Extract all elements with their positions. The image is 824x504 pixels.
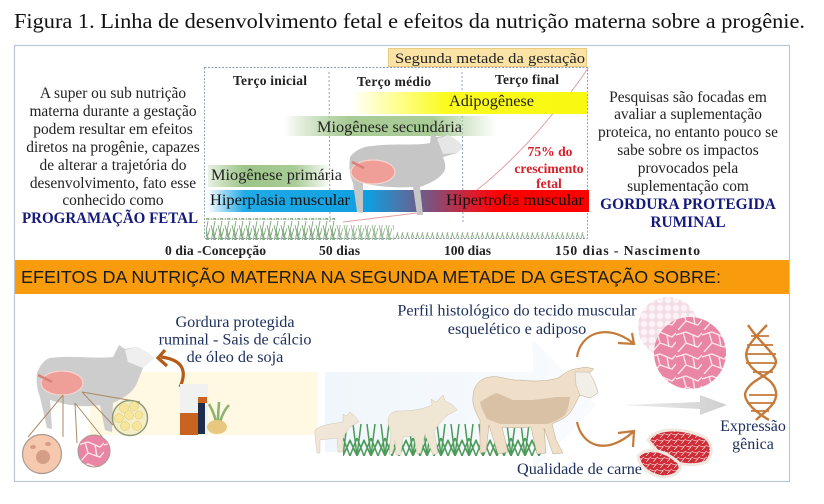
- heading: histology: Perfil histológico do tecido muscular: [397, 302, 637, 320]
- heading: histology: esquelético e adiposo: [448, 320, 586, 338]
- text block: right: sabe sobre os impactos: [617, 142, 759, 159]
- inset: cell: [22, 434, 62, 474]
- text block: left: desenvolvimento, fato esse: [30, 175, 196, 192]
- text block: left: podem resultar em efeitos: [33, 121, 193, 138]
- text block: right: avaliar a suplementação: [614, 106, 762, 123]
- trimester headings: Terço médio: [357, 74, 431, 89]
- icon: ewe with tissue insets: [22, 345, 154, 474]
- text block: right: Pesquisas são focadas em: [609, 89, 767, 106]
- arrow: feed to ewe: [161, 357, 183, 387]
- inset: fat cells: [112, 400, 148, 436]
- heading band: effects: [15, 260, 789, 294]
- bar: adipogênese: Adipogênese: [449, 93, 534, 110]
- text block: right: GORDURA PROTEGIDA: [600, 196, 776, 213]
- icon: lamb small: [315, 412, 359, 453]
- bar: hiperplasia to hipertrofia: Hipertrofia muscular: [446, 192, 585, 209]
- bar: miogênese secundária: [284, 116, 496, 136]
- text block: right: proteica, no entanto pouco se: [598, 124, 778, 141]
- timeline axis labels: [165, 243, 700, 258]
- text block: right: suplementação com: [627, 178, 749, 195]
- trimester headings: Terço final: [495, 72, 559, 87]
- background arrow: [325, 340, 597, 470]
- heading: histology: [397, 302, 637, 338]
- title: Figura 1. Linha de desenvolvimento fetal e efeitos da nutrição materna sobre a progênie.: [14, 11, 805, 33]
- text block: right: RUMINAL: [650, 214, 726, 231]
- callout: 75% fetal growth: 75% do: [528, 144, 573, 159]
- text block: left: conhecido como: [62, 192, 164, 209]
- callout: 75% fetal growth: [514, 144, 584, 191]
- timeline axis labels: 0 dia -Concepção: [165, 243, 266, 258]
- text block: left: diretos na progênie, capazes: [26, 139, 200, 156]
- text block: left: materna durante a gestação: [29, 103, 197, 120]
- heading band: effects: EFEITOS DA NUTRIÇÃO MATERNA NA SEGUNDA METADE DA GESTAÇÃO SOBRE:: [21, 267, 721, 287]
- growth curve: [343, 68, 588, 222]
- timeline axis labels: 50 dias: [319, 243, 360, 258]
- text block: left: [22, 85, 200, 227]
- text block: right: provocados pela: [638, 160, 738, 177]
- icon: lamb medium: [388, 395, 457, 455]
- bar: hiperplasia to hipertrofia: [207, 190, 589, 212]
- label: meat quality: Qualidade de carne: [517, 460, 642, 478]
- label: second half of gestation: Segunda metade da gestação: [395, 51, 585, 67]
- heading: protected fat: ruminal - Sais de cálcio: [159, 330, 311, 348]
- text block: right: [598, 89, 778, 231]
- heading: protected fat: [159, 313, 311, 366]
- icon: adipose histology: [638, 297, 698, 357]
- heading: protected fat: de óleo de soja: [187, 348, 283, 366]
- icon: DNA helix: [745, 325, 776, 420]
- arrow: to gene expression: [622, 395, 727, 415]
- trimester headings: [233, 72, 559, 89]
- panel: progeny development: [315, 297, 786, 478]
- timeline axis labels: 150 dias - Nascimento: [555, 243, 700, 258]
- bar: miogênese secundária: Miogênese secundária: [317, 119, 462, 136]
- arrow: to meat: [577, 422, 633, 446]
- text block: left: de alterar a trajetória do: [40, 157, 187, 174]
- label: gene expression: Expressão: [720, 418, 786, 435]
- arrow: to histology: [577, 332, 633, 357]
- grass strip: [206, 218, 586, 240]
- icon: adult ewe: [473, 367, 598, 454]
- panel: supplementation: [22, 313, 318, 474]
- callout: 75% fetal growth: crescimento: [514, 161, 584, 176]
- icon: pregnant ewe: [349, 134, 463, 215]
- bar: adipogênese: [350, 92, 587, 114]
- trimester headings: Terço inicial: [233, 73, 307, 88]
- heading: protected fat: Gordura protegida: [175, 313, 295, 331]
- label: gene expression: gênica: [732, 436, 774, 453]
- panel: fetal development timeline: [165, 48, 700, 258]
- bar: hiperplasia to hipertrofia: Hiperplasia muscular: [210, 192, 351, 209]
- bar: miogênese primária: Miogênese primária: [211, 167, 342, 184]
- callout: 75% fetal growth: fetal: [536, 176, 562, 191]
- icon: feed bag: [180, 384, 229, 435]
- text block: left: A super ou sub nutrição: [40, 85, 186, 102]
- grass: [343, 420, 543, 458]
- timeline axis labels: 100 dias: [444, 243, 491, 258]
- icon: muscle histology: [654, 317, 726, 389]
- label: gene expression: [720, 418, 786, 453]
- icon: meat: [638, 430, 711, 477]
- text block: left: PROGRAMAÇÃO FETAL: [22, 209, 198, 227]
- inset: muscle tissue: [78, 435, 110, 467]
